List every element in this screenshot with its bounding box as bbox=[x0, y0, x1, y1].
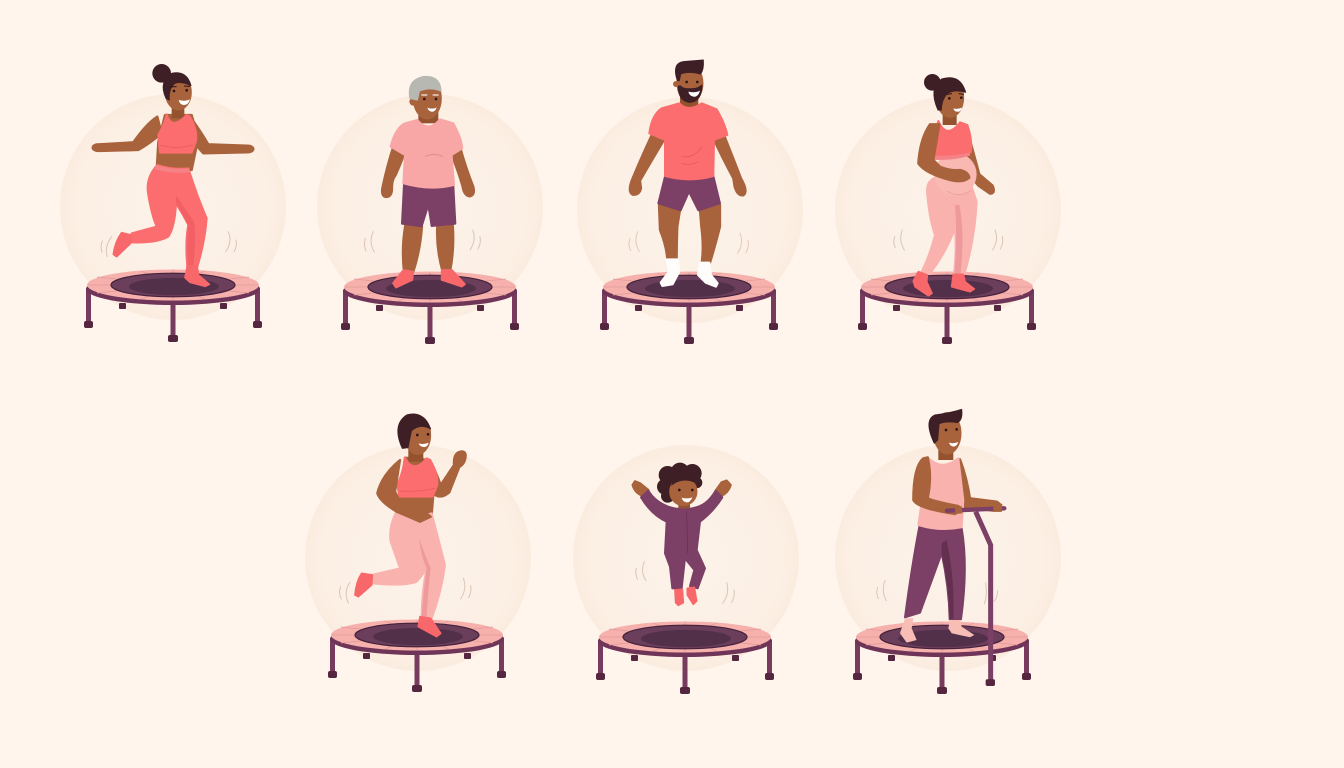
motion lines bbox=[339, 578, 471, 603]
trampoline bbox=[853, 622, 1031, 694]
trampoline bbox=[84, 270, 262, 342]
halo circle bbox=[60, 94, 286, 320]
halo circle bbox=[577, 97, 803, 323]
figure: man in tank top holding bar bbox=[900, 409, 1001, 643]
trampoline bbox=[328, 620, 506, 692]
motion lines bbox=[364, 230, 480, 252]
trampoline bbox=[341, 272, 519, 344]
panel: woman with short hair bbox=[305, 414, 531, 692]
halo circle bbox=[305, 445, 531, 671]
motion lines bbox=[101, 232, 236, 257]
motion lines bbox=[877, 581, 998, 604]
panel: older man bbox=[317, 77, 543, 344]
figure: short-haired woman in pink leggings bbox=[355, 414, 466, 637]
figure: pregnant woman in pink leggings bbox=[913, 74, 994, 296]
figure: woman in coral leggings bbox=[93, 64, 253, 286]
halo circle bbox=[573, 445, 799, 671]
handlebar bbox=[947, 502, 1004, 686]
motion lines bbox=[629, 232, 748, 253]
panel: bearded man bbox=[577, 60, 803, 344]
panel: jumping toddler bbox=[573, 445, 799, 694]
figure: toddler in purple onesie bbox=[633, 463, 731, 605]
trampoline bbox=[596, 622, 774, 694]
halo circle bbox=[835, 97, 1061, 323]
halo circle bbox=[835, 445, 1061, 671]
panel: woman with arms out bbox=[60, 64, 286, 342]
halo circle bbox=[317, 94, 543, 320]
figure: older man in pink shirt bbox=[382, 77, 474, 288]
panel: man with handlebar bbox=[835, 409, 1061, 694]
panel: pregnant woman bbox=[835, 74, 1061, 344]
motion lines bbox=[894, 230, 1003, 250]
figure: bearded man in coral shirt bbox=[630, 60, 746, 287]
motion lines bbox=[636, 562, 734, 603]
trampoline bbox=[600, 272, 778, 344]
trampoline bbox=[858, 272, 1036, 344]
